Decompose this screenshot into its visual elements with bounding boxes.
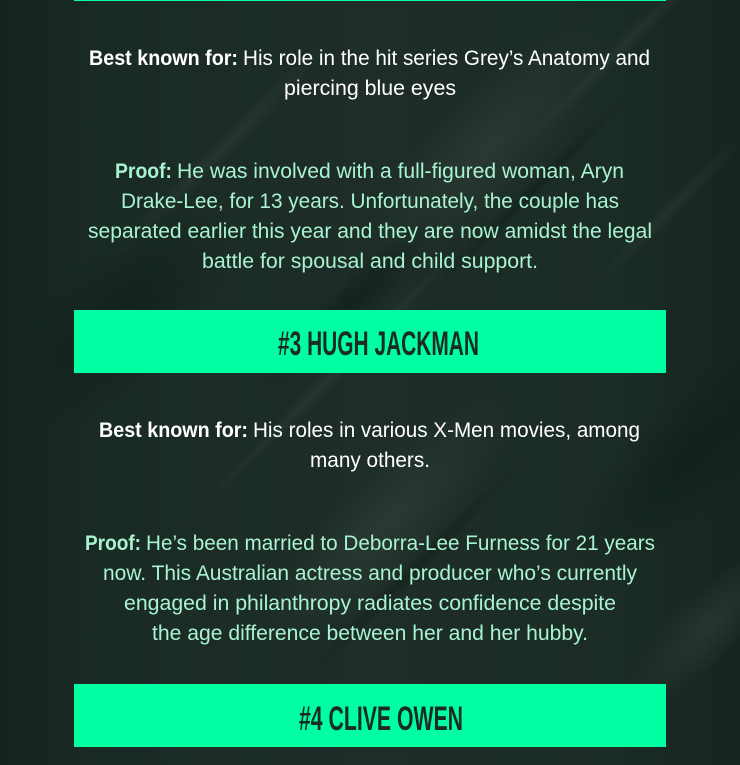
text block: proof, entry 2: Drake-Lee, for 13 years. Unfortunately, the couple has — [121, 190, 619, 213]
text block: proof, entry 2: separated earlier this year and they are now amidst the legal — [88, 220, 652, 243]
text block: best known for, entry 2: piercing blue eyes — [284, 77, 456, 100]
heading: #4 Clive Owen — [74, 684, 666, 747]
text block: proof, entry 2: Proof: — [115, 160, 172, 183]
top green bar — [74, 0, 666, 1]
text block: proof, entry 2: He was involved with a full-figured woman, Aryn — [177, 160, 624, 183]
text block: best known for, entry 2 — [89, 47, 650, 100]
text block: best known for, entry 2: Best known for: — [89, 47, 238, 70]
text block: best known for, entry 3: Best known for: — [99, 419, 248, 442]
text block: proof, entry 3: engaged in philanthropy radiates confidence despite — [124, 592, 616, 615]
text block: best known for, entry 2: His role in the hit series Grey’s Anatomy and — [243, 47, 650, 70]
text block: best known for, entry 3: His roles in various X-Men movies, among — [253, 419, 640, 442]
heading: #4 Clive Owen: #4 CLIVE OWEN — [299, 700, 463, 738]
heading: #3 Hugh Jackman: #3 HUGH JACKMAN — [278, 325, 479, 363]
heading: #3 Hugh Jackman — [74, 310, 666, 373]
text block: proof, entry 3 — [85, 532, 655, 645]
text block: proof, entry 2: battle for spousal and child support. — [202, 250, 538, 273]
text block: proof, entry 3: He’s been married to Deborra-Lee Furness for 21 years — [146, 532, 655, 555]
text block: proof, entry 3: the age difference between her and her hubby. — [152, 622, 588, 645]
text block: best known for, entry 3: many others. — [310, 449, 430, 472]
text block: proof, entry 3: now. This Australian actress and producer who’s currently — [103, 562, 637, 585]
text block: proof, entry 3: Proof: — [85, 532, 141, 555]
text block: proof, entry 2 — [88, 160, 652, 273]
text block: best known for, entry 3 — [99, 419, 640, 472]
